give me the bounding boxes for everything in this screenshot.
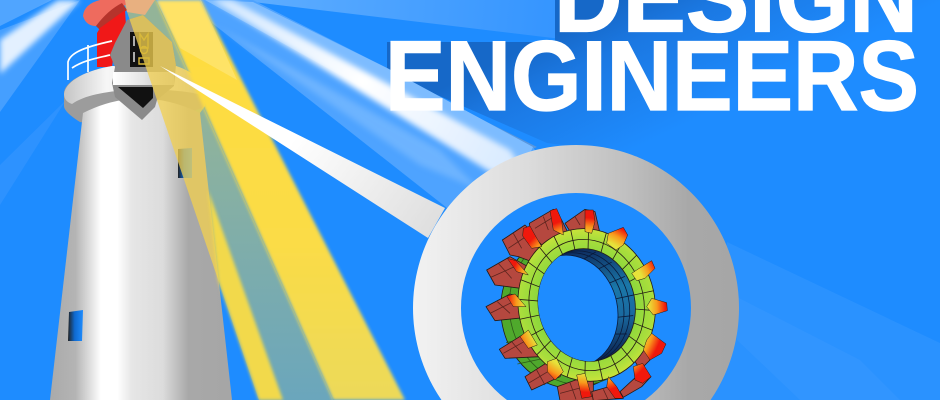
gear finite element model — [486, 209, 669, 400]
tower window upper — [178, 148, 192, 178]
gear front face — [518, 228, 656, 382]
gear tooth tips — [507, 209, 667, 398]
lantern dome — [83, 0, 155, 67]
cutaway interior — [110, 15, 176, 120]
beam: thin yellow stripe — [208, 190, 283, 400]
light rays: right of lens — [710, 242, 940, 400]
light rays: upper left — [0, 0, 80, 205]
gear bore wall — [528, 240, 646, 370]
gear back body — [486, 219, 661, 400]
gallery — [64, 66, 205, 122]
gear teeth — [486, 209, 651, 400]
circuit detail — [134, 34, 149, 64]
beam: main yellow — [156, 0, 405, 400]
gear bore opening — [538, 250, 634, 362]
beam: translucent wide band — [123, 0, 333, 400]
tower window lower — [68, 310, 83, 341]
lighthouse — [50, 0, 232, 400]
beam: yellow tint over lighthouse — [130, 15, 219, 282]
magnifier ring — [413, 145, 739, 400]
light rays: centre fan — [200, 0, 940, 208]
tower body — [50, 98, 232, 400]
railing — [68, 41, 112, 80]
pointer to lens — [160, 66, 445, 238]
